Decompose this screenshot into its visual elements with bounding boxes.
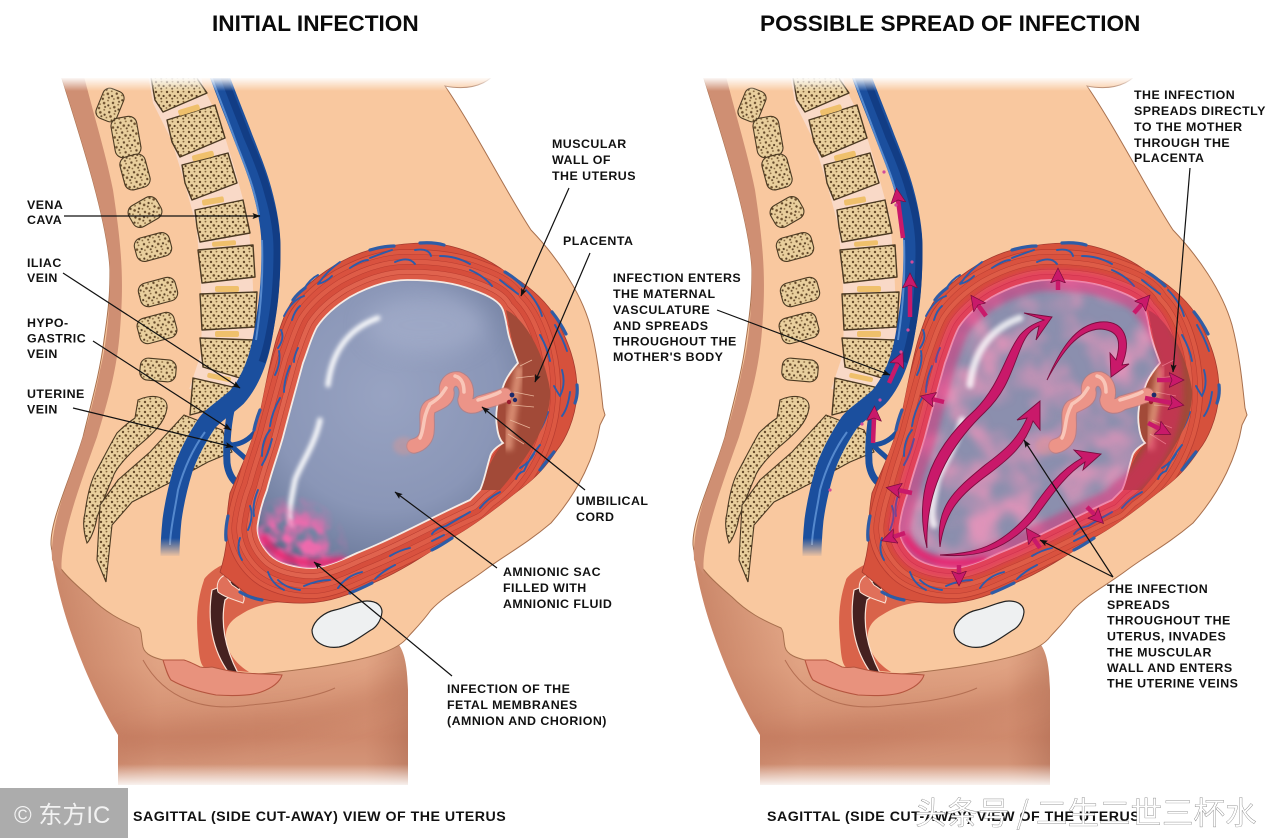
- label: spreads throughout uterus: SPREADS: [1107, 598, 1170, 612]
- vulva: [163, 660, 282, 696]
- label: spreads throughout uterus: WALL AND ENTERS: [1107, 661, 1233, 675]
- label: vena cava: VENA: [27, 198, 63, 212]
- label: spreads throughout uterus: THROUGHOUT THE: [1107, 614, 1231, 628]
- label: muscular wall: MUSCULAR: [552, 137, 627, 151]
- label: amnionic sac: FILLED WITH: [503, 581, 587, 595]
- watermark bottom left: © 东方IC: [14, 802, 110, 829]
- label: umbilical cord: UMBILICAL: [576, 494, 648, 508]
- label: umbilical cord: CORD: [576, 510, 614, 524]
- labels left: [27, 137, 648, 825]
- label: hypogastric vein: HYPO-: [27, 316, 69, 330]
- label: spreads directly to mother: THROUGH THE: [1134, 136, 1230, 150]
- blue vessels on outer wall: [226, 243, 577, 600]
- label: enters maternal vasculature: INFECTION ENTERS: [613, 271, 741, 285]
- label: placenta: PLACENTA: [563, 234, 633, 248]
- label: hypogastric vein: VEIN: [27, 347, 58, 361]
- label: uterine vein: VEIN: [27, 402, 58, 416]
- spinous processes and sacrum: [84, 86, 232, 582]
- label: spreads throughout uterus: THE UTERINE VEINS: [1107, 676, 1238, 690]
- watermark bottom left: [0, 788, 128, 838]
- label: spreads directly to mother: TO THE MOTHER: [1134, 120, 1243, 134]
- fade at vein end: [158, 538, 183, 557]
- uterine muscular wall: [220, 243, 577, 603]
- title: initial infection: INITIAL INFECTION: [212, 11, 419, 36]
- label: spreads throughout uterus: UTERUS, INVADES: [1107, 630, 1226, 644]
- lower body skin: [51, 545, 408, 785]
- right figure anatomy (same cut-away, shifted): [682, 50, 1247, 788]
- back skin band: [52, 60, 122, 575]
- disc nuclei: [178, 104, 239, 382]
- label: spreads throughout uterus: THE INFECTION: [1107, 582, 1208, 596]
- bladder: [312, 601, 382, 647]
- label: enters maternal vasculature: THE MATERNAL: [613, 287, 716, 301]
- titles: [212, 11, 1140, 36]
- label: amnionic sac: AMNIONIC FLUID: [503, 597, 612, 611]
- infected wall tint: [900, 280, 1172, 568]
- label: fetal membranes: FETAL MEMBRANES: [447, 698, 578, 712]
- torso beige cross-section: [51, 60, 605, 675]
- label: iliac vein: VEIN: [27, 271, 58, 285]
- fades at figure top and bottom: [40, 50, 520, 788]
- labels right: [613, 88, 1266, 825]
- title: possible spread: POSSIBLE SPREAD OF INFECTION: [760, 11, 1140, 36]
- spread arrows inside uterus: [922, 313, 1129, 556]
- label: uterine vein: UTERINE: [27, 387, 85, 401]
- label: vena cava: CAVA: [27, 213, 62, 227]
- caption left: SAGITTAL (SIDE CUT-AWAY) VIEW OF THE UTERUS: [133, 809, 506, 825]
- label: enters maternal vasculature: VASCULATURE: [613, 303, 710, 317]
- left figure anatomy: body, spine, vein, uterine wall: [40, 50, 605, 788]
- placenta right: [1120, 310, 1192, 490]
- lumbar vertebrae: [148, 60, 257, 415]
- label: enters maternal vasculature: THROUGHOUT THE: [613, 334, 737, 348]
- label: iliac vein: ILIAC: [27, 256, 62, 270]
- label: hypogastric vein: GASTRIC: [27, 332, 86, 346]
- label: spreads directly to mother: THE INFECTION: [1134, 88, 1235, 102]
- label: amnionic sac: AMNIONIC SAC: [503, 565, 601, 579]
- umbilical cord: [393, 376, 517, 455]
- label: fetal membranes: (AMNION AND CHORION): [447, 714, 607, 728]
- label: spreads directly to mother: SPREADS DIRECTLY: [1134, 104, 1266, 118]
- label: spreads throughout uterus: THE MUSCULAR: [1107, 646, 1212, 660]
- vagina and cervix: [197, 560, 300, 673]
- spinal discs: [172, 60, 228, 397]
- leader lines left: [63, 188, 590, 676]
- amniotic sac right, infected: [890, 270, 1172, 580]
- leader lines right: [717, 168, 1190, 577]
- vena cava: [170, 55, 277, 556]
- small outward arrows and vein arrows: [873, 200, 1172, 574]
- label: enters maternal vasculature: MOTHER'S BODY: [613, 350, 724, 364]
- label: enters maternal vasculature: AND SPREADS: [613, 319, 708, 333]
- label: muscular wall: WALL OF: [552, 153, 611, 167]
- blue veins in wall: [238, 250, 570, 590]
- label: spreads directly to mother: PLACENTA: [1134, 151, 1204, 165]
- label: muscular wall: THE UTERUS: [552, 169, 636, 183]
- placenta left: [478, 310, 550, 490]
- label: fetal membranes: INFECTION OF THE: [447, 682, 570, 696]
- watermark bottom right: 头条号 / 二生二世三杯水: [915, 788, 1256, 834]
- umbilical cord, right figure: [1035, 376, 1159, 455]
- infection dots in vena cava: [828, 170, 914, 492]
- amniotic sac left: [256, 279, 519, 569]
- caption right: SAGITTAL (SIDE CUT-AWAY) VIEW OF THE UTERUS: [767, 809, 1140, 825]
